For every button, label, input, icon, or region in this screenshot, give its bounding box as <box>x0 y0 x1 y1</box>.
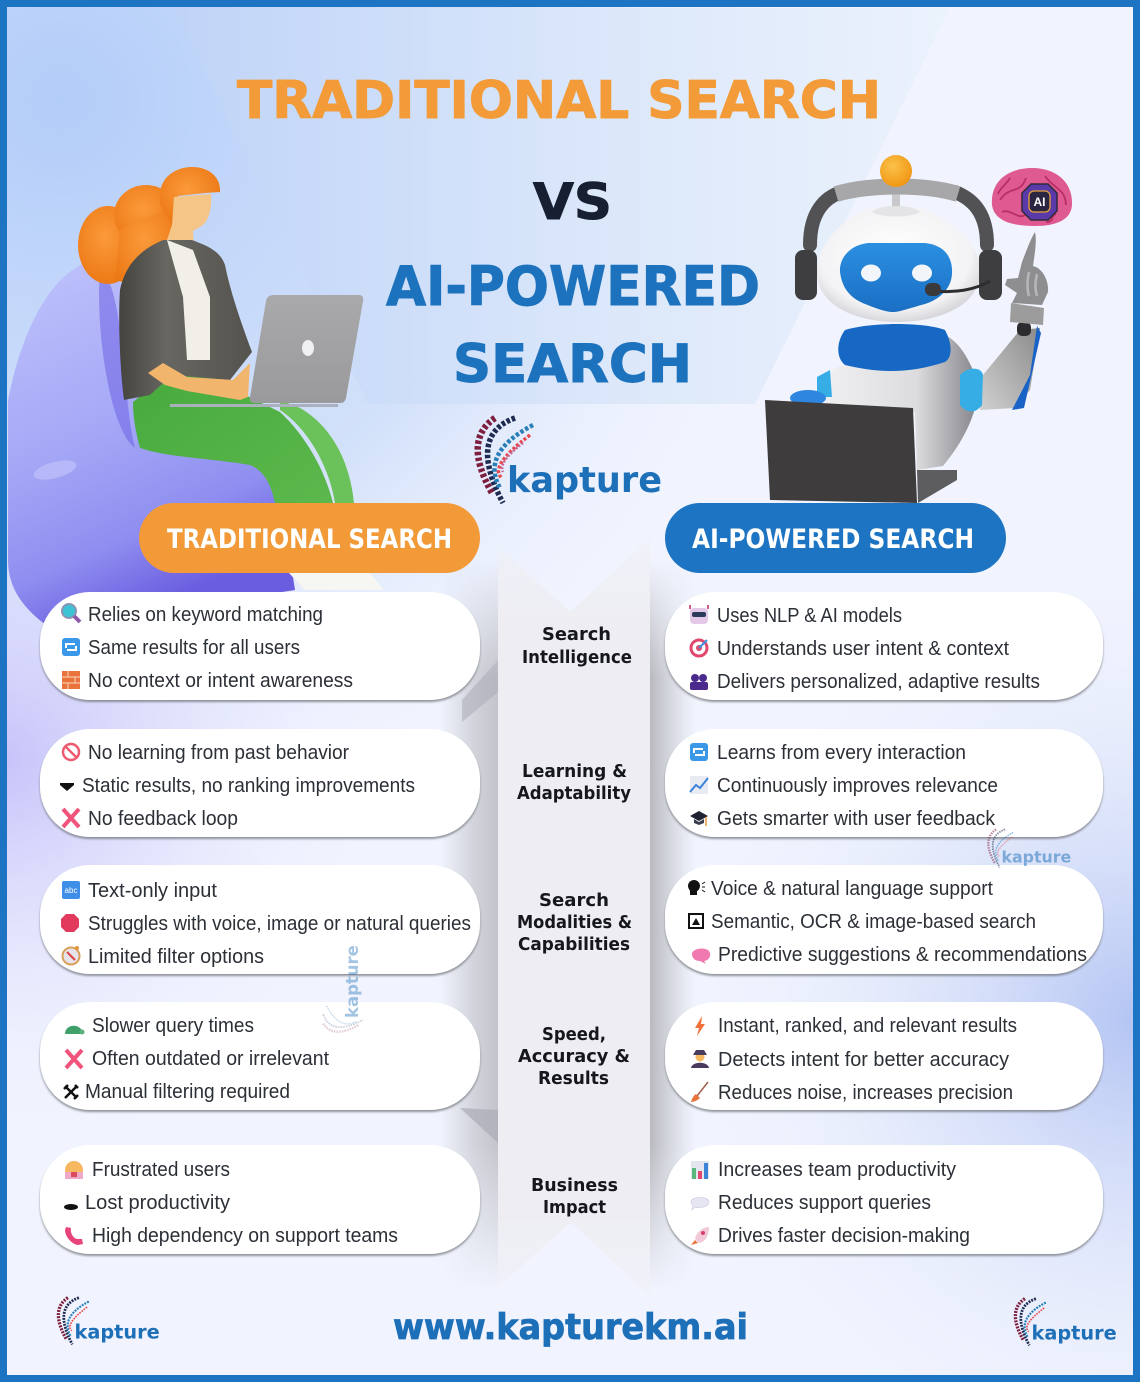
robot laptop <box>765 400 917 503</box>
icon: robot face <box>690 605 708 624</box>
text line: No learning from past behavior <box>88 742 349 764</box>
panel: traditional, learning and adaptability <box>40 729 480 837</box>
pants <box>133 358 333 503</box>
watermark wordmark: kapture <box>1001 848 1071 867</box>
wrist joint <box>1017 322 1031 336</box>
category labels <box>517 624 632 1218</box>
label: search modalities and capabilities <box>517 890 632 955</box>
head and neck <box>165 194 211 252</box>
panel: ai-powered, search modalities <box>665 865 1103 974</box>
text line: Voice & natural language support <box>711 878 993 900</box>
icon: telephone receiver <box>65 1227 83 1245</box>
panel: ai-powered, speed and accuracy <box>665 1002 1103 1110</box>
label: search modalities and capabilities: Capabilities <box>518 934 630 955</box>
text line: Struggles with voice, image or natural queries <box>88 913 471 935</box>
icon: hole <box>64 1204 78 1210</box>
text line: No context or intent awareness <box>88 670 353 692</box>
icon: compass <box>62 946 80 964</box>
title <box>237 71 881 395</box>
text line: Often outdated or irrelevant <box>92 1048 329 1070</box>
beanbag <box>8 263 295 628</box>
panel: ai-powered, learning and adaptability <box>665 729 1103 837</box>
antenna <box>892 185 900 207</box>
arm <box>980 328 1040 410</box>
sleeve <box>1012 326 1041 410</box>
kapture logo: centre <box>478 418 662 503</box>
icon: lightning <box>695 1016 705 1036</box>
label: learning and adaptability: Learning & <box>522 761 627 782</box>
text line: Lost productivity <box>85 1192 230 1214</box>
watermark logo: rotated <box>323 945 363 1032</box>
text line: Limited filter options <box>88 946 264 968</box>
chip <box>1022 184 1057 220</box>
text line: Learns from every interaction <box>717 742 966 764</box>
label: search intelligence: Intelligence <box>522 647 632 668</box>
title line: traditional search: TRADITIONAL SEARCH <box>237 71 881 131</box>
kapture logo: bottom left <box>58 1298 160 1344</box>
ball <box>880 155 912 187</box>
icon: frustrated face <box>65 1161 83 1179</box>
shirt <box>167 240 210 360</box>
brain with AI chip <box>992 168 1072 226</box>
robot face <box>840 243 952 312</box>
label: search modalities and capabilities: Modalities & <box>517 912 632 933</box>
watermark logo: upper right <box>988 829 1071 868</box>
ear cups <box>795 250 1002 300</box>
text line: Text-only input <box>88 880 217 902</box>
text line: Detects intent for better accuracy <box>718 1049 1009 1071</box>
chip label: AI <box>1034 195 1046 209</box>
icon: abc <box>62 881 80 899</box>
icon: red cross <box>63 809 79 827</box>
label: search intelligence <box>522 624 632 668</box>
logo wordmark: kapture <box>1032 1321 1117 1344</box>
text line: Static results, no ranking improvements <box>82 775 415 797</box>
label: business impact <box>531 1175 618 1218</box>
label: search intelligence: Search <box>542 624 611 645</box>
icon: pink brain <box>692 949 710 964</box>
panel: traditional, business impact <box>40 1145 480 1254</box>
panel: ai-powered, search intelligence <box>665 592 1103 700</box>
text line: Reduces noise, increases precision <box>718 1082 1013 1104</box>
text line: Relies on keyword matching <box>88 604 323 626</box>
icon: abc: abc <box>65 886 77 895</box>
icon: red cross <box>66 1050 82 1068</box>
label: business impact: Impact <box>543 1197 606 1218</box>
watermark wordmark: kapture <box>342 945 362 1018</box>
label: learning and adaptability <box>517 761 631 804</box>
text line: Increases team productivity <box>718 1159 956 1181</box>
kapture logo: bottom right <box>1015 1299 1117 1345</box>
icon: rising chart <box>690 776 708 794</box>
icon: black tray <box>60 784 74 791</box>
panel: traditional, search intelligence <box>40 592 480 700</box>
collar <box>838 324 951 371</box>
robot laptop base <box>917 470 957 503</box>
wrist cuff <box>1010 303 1044 325</box>
head <box>817 208 980 322</box>
text line: Instant, ranked, and relevant results <box>718 1015 1017 1037</box>
icon: broom <box>691 1082 708 1102</box>
icon: people <box>690 674 708 690</box>
text line: Reduces support queries <box>718 1192 931 1214</box>
icon: prohibited <box>63 744 79 760</box>
forearm <box>148 363 250 400</box>
icon: stop sign <box>61 914 79 932</box>
headband <box>810 186 987 245</box>
central comparison band <box>448 575 688 1271</box>
text line: Predictive suggestions & recommendations <box>718 944 1087 966</box>
jacket <box>119 240 252 400</box>
label: speed accuracy and results: Accuracy & <box>518 1046 630 1067</box>
text line: Delivers personalized, adaptive results <box>717 671 1040 693</box>
text line: Uses NLP & AI models <box>717 605 902 627</box>
back leg <box>280 400 354 503</box>
laptop logo <box>302 340 314 356</box>
bean shading <box>99 270 135 448</box>
icon: speaking head <box>688 880 705 895</box>
laptop <box>250 295 363 403</box>
text line: Understands user intent & context <box>717 638 1009 660</box>
panel: traditional, search modalities <box>40 865 480 974</box>
head top cap <box>872 206 920 216</box>
text line: Slower query times <box>92 1015 254 1037</box>
column header: traditional search <box>139 503 480 573</box>
title line: search: SEARCH <box>453 334 692 395</box>
panel: ai-powered, business impact <box>665 1145 1103 1254</box>
text line: High dependency on support teams <box>92 1225 398 1247</box>
text line: Same results for all users <box>88 637 300 659</box>
label: speed accuracy and results: Results <box>538 1068 609 1089</box>
microphone <box>925 281 990 296</box>
bean highlight <box>32 457 78 483</box>
panel: traditional, speed and accuracy <box>40 1002 480 1110</box>
icon: turtle <box>65 1026 84 1034</box>
illustration: robot with headset <box>765 155 1072 503</box>
title line: vs: VS <box>533 173 612 231</box>
icon: repeat <box>62 638 80 656</box>
label: speed accuracy and results: Speed, <box>542 1024 606 1045</box>
icon: brick wall <box>62 671 80 689</box>
illustration: woman with laptop on beanbag <box>8 167 384 628</box>
icon: bar chart <box>691 1161 709 1179</box>
text line: Semantic, OCR & image-based search <box>711 911 1036 933</box>
label: speed accuracy and results <box>518 1024 630 1089</box>
header label: TRADITIONAL SEARCH <box>167 524 452 555</box>
text line: Gets smarter with user feedback <box>717 808 996 830</box>
icon: framed picture <box>689 914 703 928</box>
hand <box>1005 232 1048 305</box>
laptop base <box>170 404 338 407</box>
icon: detective <box>691 1050 709 1068</box>
label: learning and adaptability: Adaptability <box>517 783 631 804</box>
text line: Continuously improves relevance <box>717 775 998 797</box>
text line: Drives faster decision-making <box>718 1225 970 1247</box>
label: business impact: Business <box>531 1175 618 1196</box>
robot body <box>825 335 978 470</box>
icon: tools <box>64 1085 78 1099</box>
icon: graduation cap <box>690 811 708 826</box>
text line: Manual filtering required <box>85 1081 290 1103</box>
logo wordmark: kapture <box>74 1320 160 1343</box>
icon: speech bubble <box>691 1198 709 1210</box>
icon: repeat <box>690 743 708 761</box>
icon: target <box>691 640 707 656</box>
icon: rocket <box>691 1227 709 1245</box>
column header: ai-powered search <box>665 503 1006 573</box>
website url: www.kapturekm.ai <box>393 1307 748 1348</box>
hair <box>78 167 220 290</box>
eyes <box>861 264 932 282</box>
logo wordmark: kapture <box>507 460 662 501</box>
icon: magnifier <box>62 604 80 622</box>
shoulder joints <box>790 369 983 411</box>
header label: AI-POWERED SEARCH <box>692 524 974 555</box>
title line: ai-powered: AI-POWERED <box>386 255 760 318</box>
label: search modalities and capabilities: Search <box>539 890 609 911</box>
text line: No feedback loop <box>88 808 238 830</box>
shoe <box>289 573 384 590</box>
text line: Frustrated users <box>92 1159 230 1181</box>
